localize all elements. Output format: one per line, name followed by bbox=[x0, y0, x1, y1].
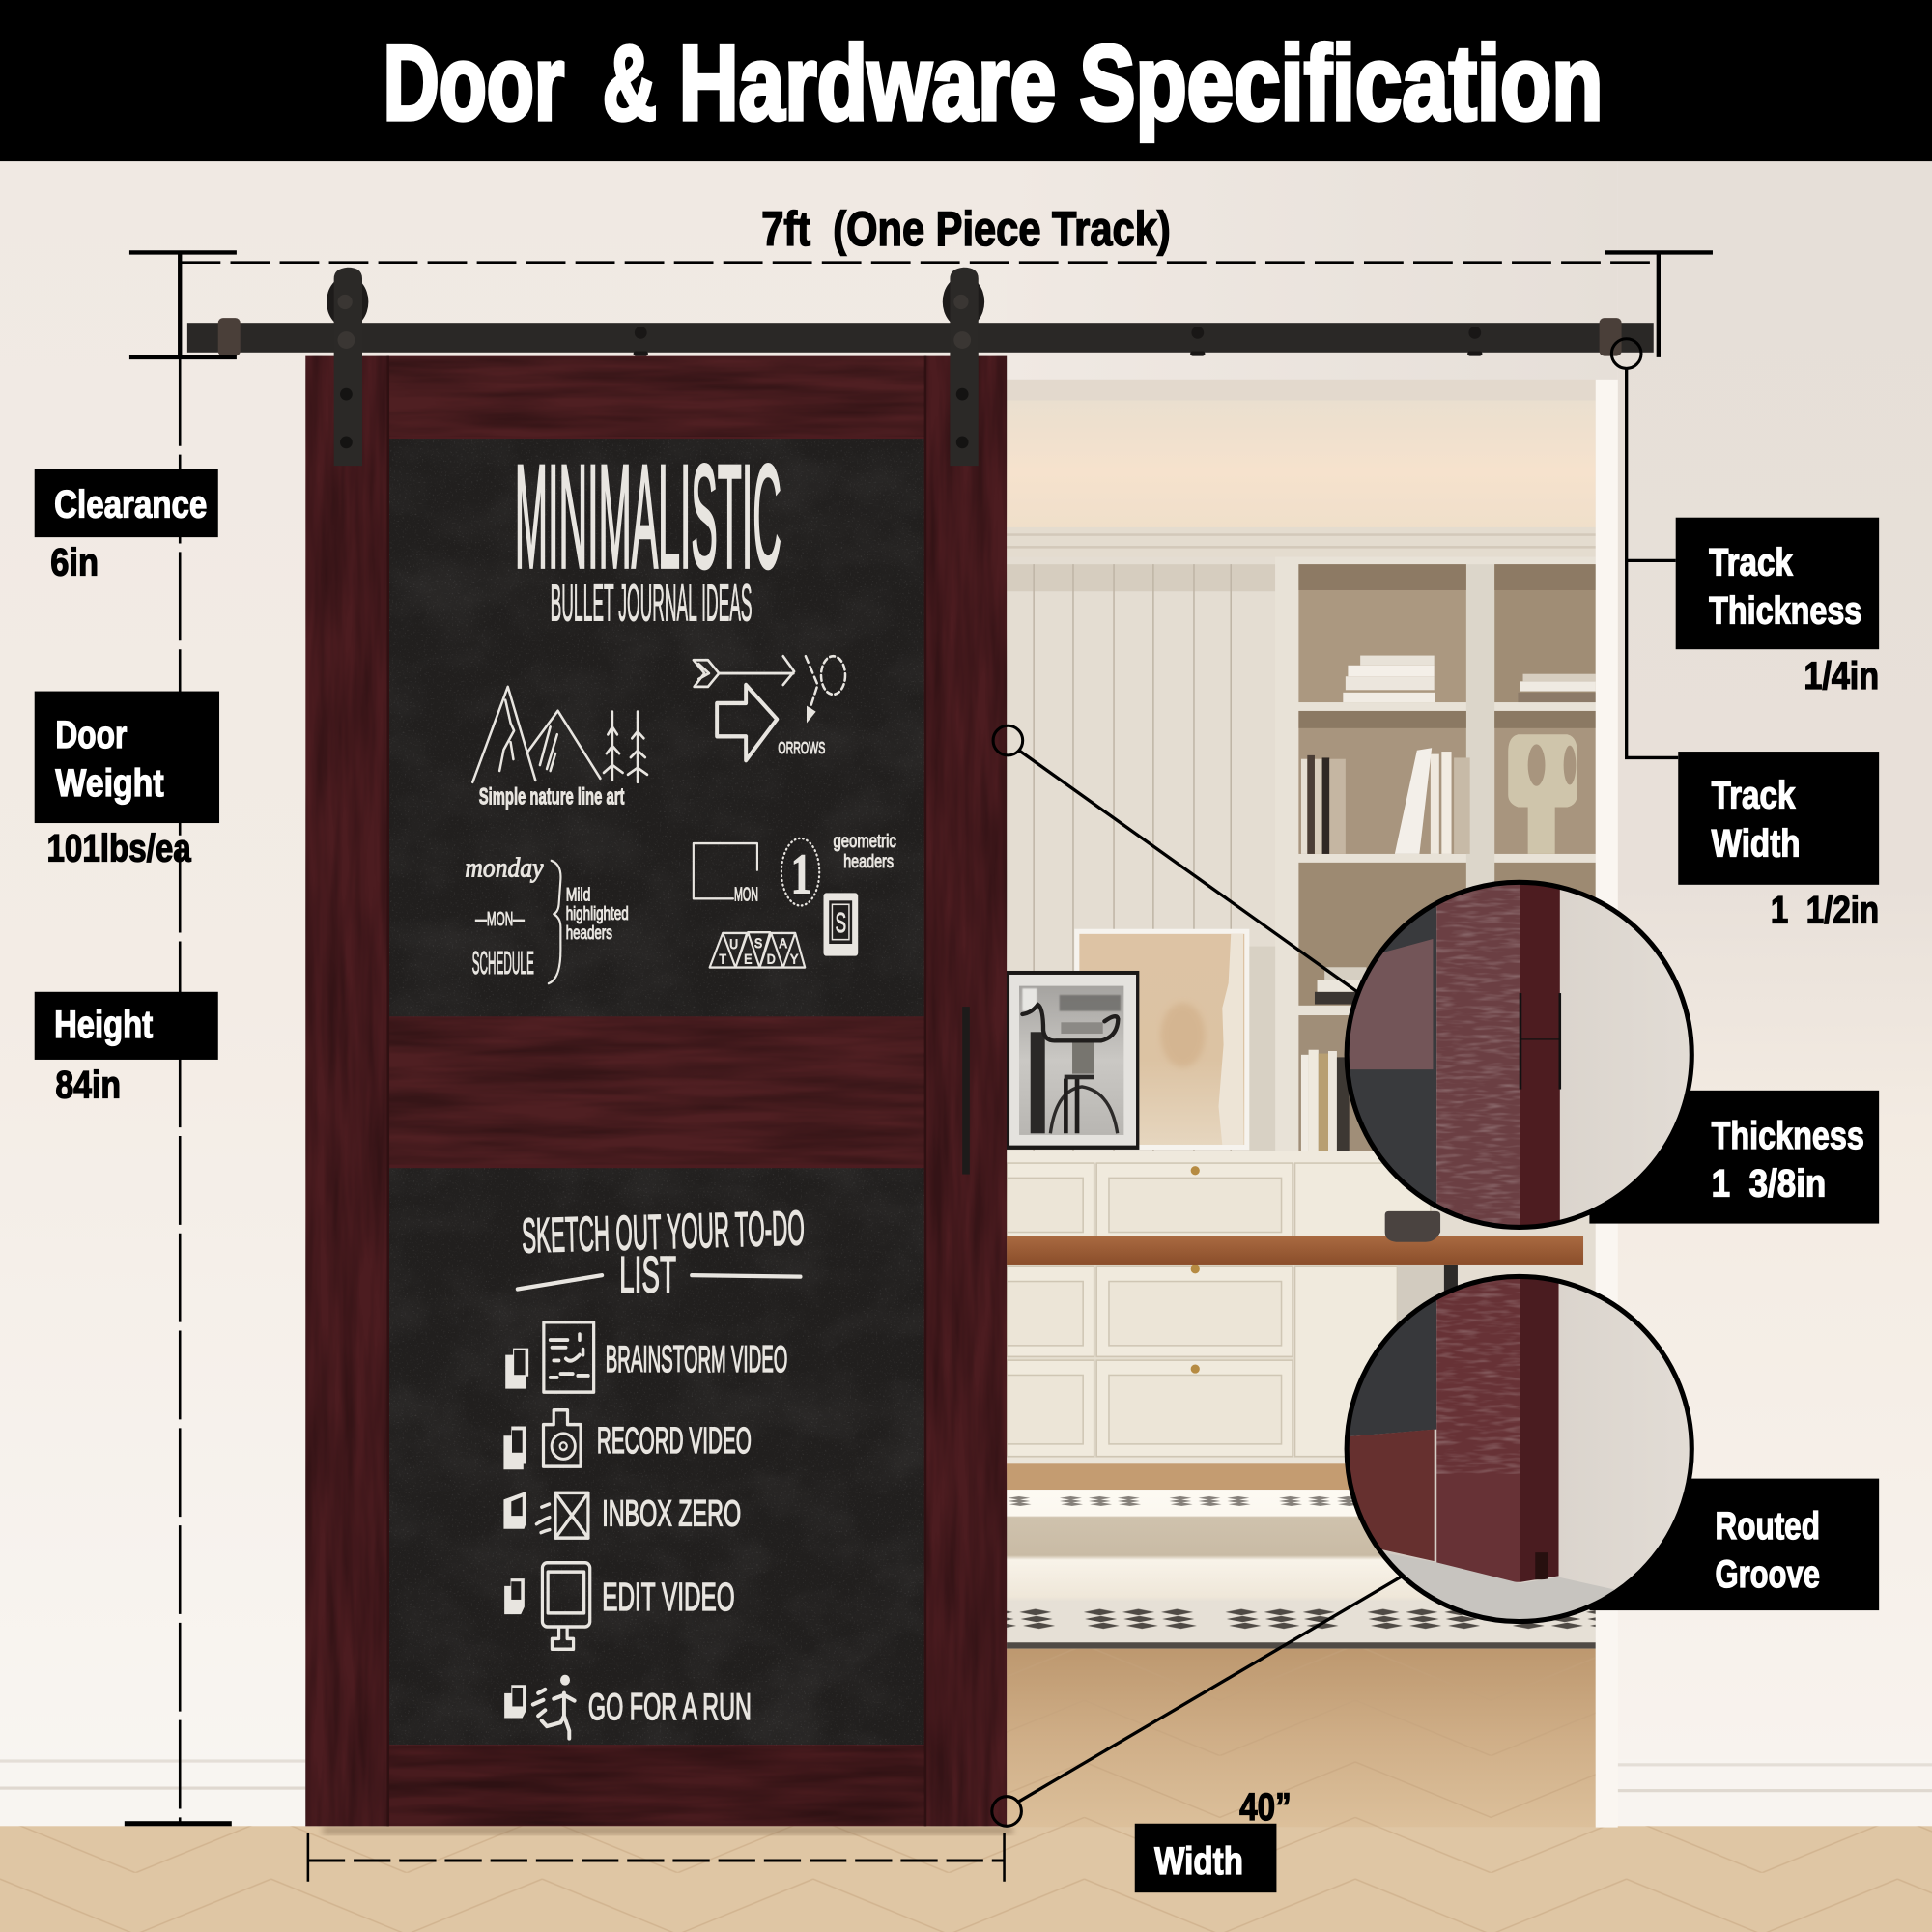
label: height: 84in bbox=[55, 1064, 121, 1106]
row: brainstorm video: BRAINSTORM VIDEO bbox=[606, 1338, 787, 1379]
barn door track and hardware bbox=[187, 268, 1654, 466]
row: record video bbox=[503, 1410, 752, 1469]
label: door weight: Weight bbox=[55, 762, 164, 805]
label: width bbox=[1135, 1786, 1292, 1892]
TUESDAY bunting: D bbox=[767, 952, 776, 967]
magnifier: routed groove bbox=[1347, 1276, 1691, 1623]
track length dimension bbox=[129, 202, 1713, 357]
title: Hardware bbox=[679, 25, 1056, 143]
callout connector: routed groove bbox=[992, 1575, 1405, 1826]
header bar bbox=[0, 0, 1932, 161]
label: track thickness: Thickness bbox=[1709, 589, 1861, 632]
rails bbox=[389, 357, 924, 1825]
label: routed groove: Groove bbox=[1716, 1553, 1820, 1596]
left hanger bbox=[327, 268, 368, 466]
track stoppers bbox=[218, 318, 1622, 356]
TUESDAY bunting bbox=[710, 932, 805, 968]
label: track width bbox=[1678, 752, 1879, 931]
lower floor and rug bbox=[1007, 1463, 1596, 1828]
chalk drawings: top: —MON— bbox=[475, 908, 525, 930]
chalkboard panel: bottom bbox=[389, 1168, 924, 1745]
chalk drawings: top: ORROWS bbox=[778, 738, 825, 757]
title: Door bbox=[384, 25, 564, 143]
label: thickness: Thickness bbox=[1712, 1115, 1864, 1157]
row: edit video bbox=[504, 1563, 735, 1649]
door casing bbox=[1596, 380, 1618, 1828]
TUESDAY bunting: Y bbox=[790, 952, 799, 967]
table and cup bbox=[1007, 1211, 1583, 1265]
label: routed groove bbox=[1589, 1479, 1879, 1610]
books, third and fourth shelf bbox=[1301, 967, 1369, 1152]
row: record video: RECORD VIDEO bbox=[597, 1419, 752, 1461]
cabinets bbox=[1007, 1151, 1458, 1466]
text: MINIMALISTIC bbox=[515, 435, 781, 599]
row: inbox zero bbox=[503, 1492, 741, 1538]
TUESDAY bunting: E bbox=[744, 952, 752, 967]
chalk drawings: top: 1 bbox=[791, 843, 811, 906]
room seen through the doorway bbox=[1007, 380, 1618, 1828]
title: & bbox=[603, 25, 657, 143]
label: track thickness: Track bbox=[1709, 542, 1794, 584]
art print leaning on wall bbox=[1074, 929, 1275, 1151]
chalk drawings: top: headers bbox=[843, 850, 894, 871]
label: height bbox=[35, 992, 218, 1106]
track callout connector bbox=[1611, 339, 1678, 757]
label: height: Height bbox=[54, 1004, 153, 1046]
chalk mountains and trees bbox=[472, 687, 647, 782]
chalk drawings: top bbox=[465, 435, 896, 983]
width dimension line bbox=[308, 1833, 1005, 1882]
TUESDAY bunting: S bbox=[754, 935, 762, 951]
left and right stiles bbox=[305, 356, 1007, 1826]
label: door weight bbox=[35, 692, 219, 870]
row: inbox zero: INBOX ZERO bbox=[602, 1492, 741, 1534]
chalk to-do list: LIST bbox=[619, 1246, 676, 1303]
track length label: 7ft (One Piece Track) bbox=[761, 202, 1171, 256]
height dimension line bbox=[125, 357, 232, 1826]
door pull handle bbox=[962, 1007, 970, 1175]
label: thickness bbox=[1589, 1091, 1879, 1224]
S stamp bbox=[823, 893, 858, 956]
baseboards bbox=[0, 1756, 1932, 1830]
label: thickness: 1 3/8in bbox=[1712, 1163, 1826, 1206]
label: clearance: Clearance bbox=[54, 484, 207, 526]
chalk drawings: top: MON bbox=[734, 883, 758, 906]
S stamp: S bbox=[836, 907, 846, 938]
TUESDAY bunting: U bbox=[729, 936, 738, 952]
label: track width: Track bbox=[1712, 775, 1796, 817]
bookcase bbox=[1275, 557, 1596, 1163]
books, top shelf bbox=[1343, 656, 1596, 702]
label: track width: 1 1/2in bbox=[1771, 889, 1879, 931]
label: track width: Width bbox=[1712, 822, 1801, 865]
label: clearance: 6in bbox=[50, 542, 99, 584]
chalk drawings: top: Simple nature line art bbox=[479, 782, 625, 810]
row: go for a run: GO FOR A RUN bbox=[588, 1686, 752, 1727]
row: go for a run bbox=[504, 1675, 752, 1739]
title: Specification bbox=[1079, 25, 1603, 143]
floor bbox=[0, 1826, 1932, 1932]
label: width: 40” bbox=[1239, 1786, 1292, 1829]
row: brainstorm video bbox=[505, 1322, 787, 1392]
framed bicycle photo bbox=[1007, 971, 1139, 1150]
chalk drawings: top: SCHEDULE bbox=[472, 944, 534, 980]
label: door weight: 101lbs/ea bbox=[46, 828, 192, 870]
chalkboard panel: top bbox=[389, 435, 924, 1016]
label: track thickness: 1/4in bbox=[1804, 655, 1879, 697]
TUESDAY bunting: A bbox=[780, 935, 787, 951]
chalk drawings: top: headers bbox=[566, 923, 612, 943]
track bolts bbox=[634, 327, 1482, 356]
row: edit video: EDIT VIDEO bbox=[602, 1577, 735, 1620]
label: routed groove: Routed bbox=[1716, 1505, 1820, 1548]
books, second shelf bbox=[1301, 734, 1577, 854]
chalk drawings: top: geometric bbox=[834, 830, 896, 851]
beadboard wall bbox=[1007, 557, 1284, 1161]
label: clearance bbox=[35, 469, 218, 584]
magnifier: door thickness bbox=[1347, 882, 1691, 1227]
sliding door bbox=[305, 356, 1007, 1826]
chalkboard panel: bottom: SKETCH OUT YOUR TO-DO bbox=[521, 1201, 805, 1264]
track bbox=[187, 323, 1654, 353]
right hanger bbox=[943, 268, 984, 466]
soffit and upper wall bbox=[1007, 380, 1596, 557]
chalk to-do list bbox=[503, 1201, 805, 1739]
label: width: Width bbox=[1154, 1840, 1243, 1883]
chalk header samples: monday bbox=[465, 852, 544, 883]
chalk drawings: top: highlighted bbox=[566, 903, 629, 923]
callout connector: thickness bbox=[993, 725, 1359, 993]
chalk arrows bbox=[694, 656, 845, 760]
label: track thickness bbox=[1676, 518, 1879, 697]
chalk drawings: top: Mild bbox=[566, 885, 590, 905]
chalk drawings: top: BULLET JOURNAL IDEAS bbox=[551, 574, 753, 632]
TUESDAY bunting: T bbox=[720, 952, 726, 967]
label: door weight: Door bbox=[55, 714, 127, 756]
title bbox=[384, 25, 1603, 143]
